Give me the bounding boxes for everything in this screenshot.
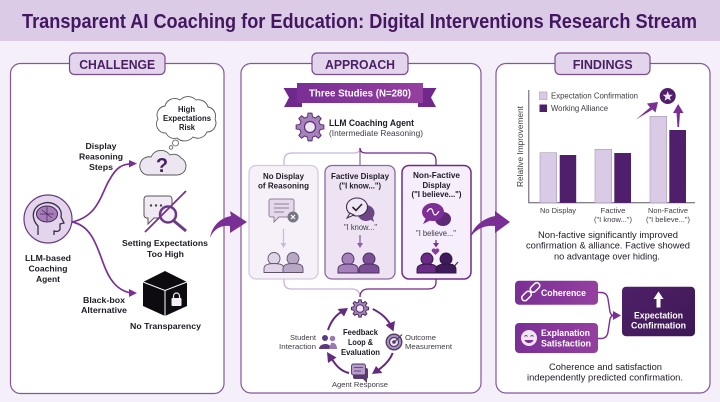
label: LLM coaching agent: (Intermediate Reasoning): [329, 129, 423, 138]
box: expectation confirmation: Confirmation: [631, 320, 686, 330]
card: factive display: "I know...": [344, 223, 377, 232]
legend: Working Alliance: [551, 104, 609, 113]
label: setting expectations too high: [122, 238, 208, 259]
card: non-factive display: "I believe...": [416, 229, 456, 238]
icon: wave speech bubbles: [422, 203, 451, 226]
arrows: cycle: [328, 309, 393, 373]
x-axis labels: No Display: [540, 206, 576, 215]
arrow: predictors to confirmation: [598, 292, 621, 338]
label: feedback loop and evaluation: [341, 327, 380, 357]
text: chart finding: [526, 230, 690, 262]
card: factive display: ("I know..."): [339, 180, 381, 190]
icon: thought cloud high expectations risk: High: [178, 105, 195, 114]
arrow: to black-box: [72, 222, 137, 297]
heading: approach: APPROACH: [325, 57, 395, 72]
feedback loop: [279, 300, 453, 389]
panel: approach: [241, 53, 481, 393]
x-axis labels: ("I believe..."): [646, 215, 690, 224]
icon: thought cloud high expectations risk: [156, 97, 216, 149]
card: no display of reasoning: [249, 166, 318, 279]
label: LLM-based coaching agent: [25, 253, 71, 284]
icon: star badge: [660, 88, 676, 104]
card: factive display: [325, 166, 395, 279]
icon: users: [338, 253, 379, 273]
card: non-factive display: Display: [422, 180, 451, 190]
heading: challenge: [70, 53, 165, 74]
box: explanation satisfaction: Explanation: [541, 328, 590, 338]
box: coherence: Coherence: [541, 288, 586, 298]
arrow: approach to findings: [470, 211, 510, 238]
arrow: challenge to approach: [210, 211, 247, 238]
ribbon: three studies: Three Studies (N=280): [309, 88, 411, 100]
label: black-box alternative: [81, 295, 127, 315]
text: chart finding: confirmation & alliance. Factive showed: [526, 241, 690, 251]
box: explanation satisfaction: [515, 323, 598, 353]
icon: target: [386, 334, 402, 350]
icon: agent response chat: [352, 364, 368, 383]
label: black-box alternative: Black-box: [83, 295, 125, 305]
box: expectation confirmation: [622, 287, 695, 336]
icon: students: [319, 335, 337, 349]
icon: chat with crossed magnifier: [144, 191, 186, 232]
label: feedback loop and evaluation: Feedback: [343, 327, 378, 337]
box: coherence: [515, 281, 598, 305]
label: outcome measurement: Outcome: [405, 333, 436, 342]
arrow: to display reasoning: [72, 160, 137, 222]
y-axis label: Relative Improvement: [516, 105, 525, 187]
icon: black box with lock: [143, 271, 187, 316]
label: LLM coaching agent: [329, 118, 423, 138]
bars: non-factive: [650, 116, 686, 203]
label: LLM-based coaching agent: LLM-based: [25, 253, 71, 263]
panel: challenge: [10, 53, 224, 394]
text: predictors finding: independently predicted confirmation.: [527, 372, 683, 382]
icon: gear: [296, 113, 324, 141]
card: factive display: Factive Display: [331, 171, 389, 181]
label: outcome measurement: Measurement: [405, 342, 453, 351]
label: display reasoning steps: Display: [86, 141, 117, 151]
arrowheads: cycle: [327, 308, 395, 374]
label: display reasoning steps: [79, 141, 123, 172]
card: non-factive display: [402, 166, 471, 279]
card: non-factive display: Non-Factive: [413, 170, 460, 180]
label: student interaction: Interaction: [279, 342, 316, 351]
panel: findings: [496, 53, 710, 393]
x-axis labels: [540, 206, 690, 224]
card: no display of reasoning: of Reasoning: [258, 180, 309, 190]
header band with title: [0, 0, 720, 41]
icon: users: [264, 252, 303, 272]
label: LLM-based coaching agent: Agent: [36, 274, 60, 284]
ribbon: three studies: [284, 83, 436, 107]
x-axis labels: Factive: [600, 206, 626, 215]
label: black-box alternative: Alternative: [81, 305, 127, 315]
x-axis labels: ("I know..."): [594, 215, 632, 224]
card: no display of reasoning: No Display: [263, 171, 304, 181]
bars: no display: [540, 153, 576, 203]
icon: thought cloud high expectations risk: Expectations: [163, 114, 212, 123]
icon: check speech bubbles: [346, 198, 374, 222]
heading: findings: FINDINGS: [573, 57, 633, 72]
arrow: [357, 235, 363, 248]
arrow: [280, 229, 286, 248]
legend: [540, 92, 638, 113]
connectors to feedback loop: [284, 279, 436, 297]
text: chart finding: no advantage over hiding.: [554, 252, 660, 262]
icon: muted chat: [269, 199, 298, 222]
label: student interaction: [279, 333, 317, 351]
icon: loop gear: [351, 300, 369, 317]
label: LLM-based coaching agent: Coaching: [28, 264, 68, 274]
label: display reasoning steps: Steps: [89, 162, 113, 172]
text: chart finding: Non-factive significantly improved: [538, 230, 678, 240]
text: predictors finding: [527, 362, 683, 382]
icon: thought cloud high expectations risk: Risk: [179, 123, 196, 132]
label: feedback loop and evaluation: Loop &: [348, 337, 373, 347]
heading: findings: [555, 53, 650, 74]
card: non-factive display: ("I believe..."): [412, 189, 462, 199]
icon: cloud with question mark: [140, 150, 186, 177]
arrows: improvement: [636, 102, 684, 127]
heading: challenge: CHALLENGE: [79, 57, 156, 72]
label: no transparency: No Transparency: [130, 321, 201, 331]
connectors to study cards: [284, 148, 436, 165]
label: display reasoning steps: Reasoning: [79, 152, 123, 162]
bars: factive: [595, 149, 631, 203]
label: student interaction: Student: [290, 333, 317, 342]
legend: Expectation Confirmation: [551, 92, 638, 100]
arrow: [433, 240, 439, 248]
axes: [529, 90, 695, 203]
label: outcome measurement: [405, 333, 453, 351]
box: expectation confirmation: Expectation: [634, 310, 683, 320]
icon: LLM agent head: [24, 195, 72, 243]
icon: cloud with question mark: ?: [156, 155, 168, 177]
label: feedback loop and evaluation: Evaluation: [341, 347, 380, 357]
heading: approach: [312, 53, 408, 74]
label: setting expectations too high: Too High: [147, 249, 184, 259]
x-axis labels: Non-Factive: [648, 206, 688, 215]
label: LLM coaching agent: LLM Coaching Agent: [329, 118, 414, 128]
text: predictors finding: Coherence and satisfaction: [549, 362, 662, 372]
icon: users with check: [417, 253, 458, 273]
box: explanation satisfaction: Satisfaction: [541, 338, 591, 348]
bar chart: [516, 88, 695, 224]
label: setting expectations too high: Setting Expectations: [122, 238, 208, 248]
label: agent response: Agent Response: [332, 380, 388, 389]
icon: heart: [432, 248, 439, 255]
